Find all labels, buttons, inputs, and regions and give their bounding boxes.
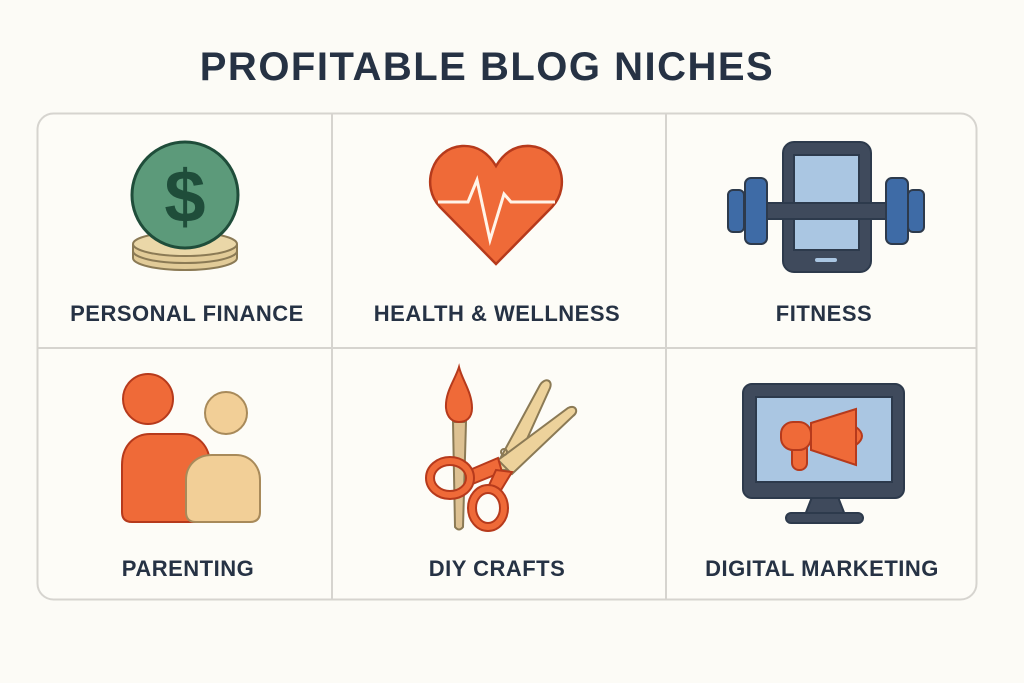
panel: parenting bbox=[122, 374, 260, 581]
icon: monitor with megaphone bbox=[743, 384, 904, 523]
icon: coin bbox=[132, 142, 238, 270]
panel: diy crafts bbox=[429, 367, 576, 581]
icon: coin: $ bbox=[164, 155, 206, 238]
label: personal finance: PERSONAL FINANCE bbox=[70, 301, 304, 326]
label: health: HEALTH & WELLNESS bbox=[374, 301, 620, 326]
icon: parent and child bbox=[122, 374, 260, 522]
icon: brush and scissors bbox=[430, 367, 576, 530]
icon: phone with dumbbell bbox=[728, 142, 924, 272]
label: parenting: PARENTING bbox=[122, 556, 254, 581]
label: fitness: FITNESS bbox=[776, 301, 872, 326]
panel: fitness bbox=[728, 142, 924, 326]
icon: heart bbox=[430, 146, 562, 264]
label: diy crafts: DIY CRAFTS bbox=[429, 556, 565, 581]
label: digital marketing: DIGITAL MARKETING bbox=[705, 556, 939, 581]
panel: health bbox=[374, 146, 620, 326]
panel: digital marketing bbox=[705, 384, 939, 581]
title: PROFITABLE BLOG NICHES bbox=[200, 45, 774, 89]
panel: personal finance bbox=[70, 142, 304, 326]
grid panel bbox=[38, 114, 976, 600]
